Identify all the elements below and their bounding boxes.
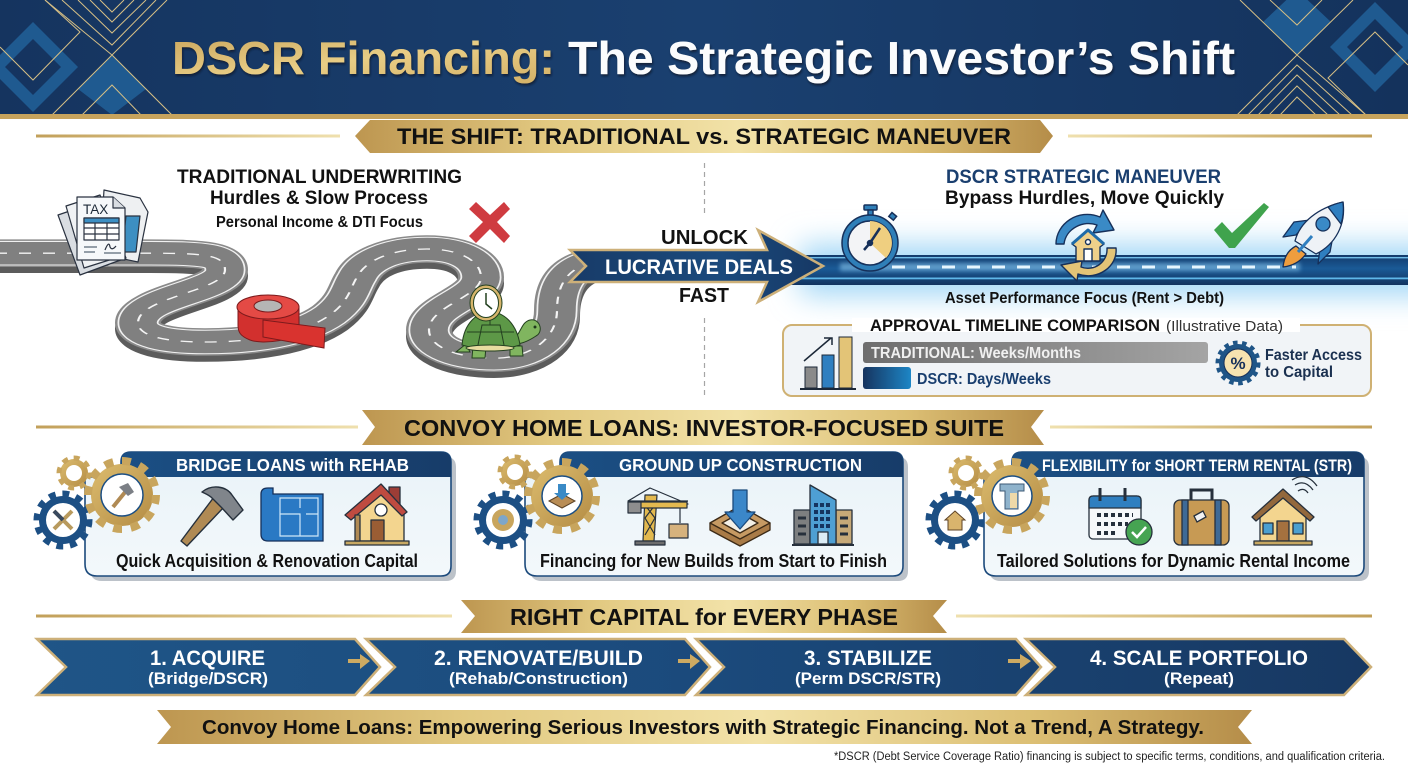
phase 4: scale portfolio: 4. SCALE PORTFOLIO: [1090, 646, 1308, 670]
card header: [121, 452, 451, 477]
card header: GROUND UP CONSTRUCTION: [619, 455, 862, 475]
icon: bar chart growth: [800, 337, 856, 389]
icon: hammer: [181, 487, 243, 546]
closing banner: Convoy Home Loans: Empowering Serious Investors with Strategic Financing. Not a Trend, A Strategy.: [202, 716, 1204, 739]
section banner: right capital: RIGHT CAPITAL for EVERY PHASE: [510, 604, 898, 630]
phase 1: acquire: 1. ACQUIRE: [150, 646, 265, 670]
icon: crane: [628, 488, 688, 545]
icon: rental house with wifi: [1252, 477, 1317, 545]
phase 2: renovate/build: 2. RENOVATE/BUILD: [434, 646, 643, 670]
card header: BRIDGE LOANS with REHAB: [176, 455, 409, 475]
panel: traditional underwriting: [0, 166, 590, 364]
caption: Financing for New Builds from Start to Finish: [540, 551, 887, 571]
icon: turtle with clock: [456, 285, 540, 358]
icon: tax documents: [58, 190, 148, 275]
unlock lucrative deals arrow: [570, 227, 823, 307]
phase 3: stabilize: [696, 639, 1041, 695]
card header: [1012, 452, 1364, 477]
section banner: the shift: [36, 120, 1372, 153]
header gold rule: [0, 114, 1408, 119]
gears: [37, 458, 156, 546]
icon: calendar: [1089, 488, 1152, 545]
section banner: investor-focused suite: [36, 410, 1372, 445]
panel: short term rental: [929, 452, 1369, 581]
section banner: investor-focused suite: CONVOY HOME LOANS: INVESTOR-FOCUSED SUITE: [404, 415, 1004, 441]
subheading: hurdles: Hurdles & Slow Process: [210, 187, 428, 209]
phase 2: renovate/build: (Rehab/Construction): [449, 670, 628, 688]
panel: bridge loans: [37, 452, 456, 581]
title: [172, 32, 1235, 84]
icon: house with cycle arrows: [1056, 210, 1116, 281]
icon: house under renovation: [345, 484, 409, 545]
icon: suitcase: [1174, 490, 1229, 545]
fast highway: [770, 255, 1408, 285]
highway glow: [800, 245, 1408, 295]
unlock lucrative deals arrow: FAST: [679, 285, 729, 307]
caption: Tailored Solutions for Dynamic Rental Income: [997, 551, 1350, 571]
phase 3: stabilize: 3. STABILIZE: [804, 646, 932, 670]
panel: ground up construction: [477, 452, 908, 581]
title: The Strategic Investor’s Shift: [568, 32, 1235, 84]
icon: tax documents: TAX: [83, 202, 108, 217]
heading: traditional: TRADITIONAL UNDERWRITING: [177, 166, 462, 188]
callout: faster access: to Capital: [1265, 364, 1333, 381]
phase 1: acquire: [37, 639, 380, 695]
caption: asset performance: Asset Performance Focus (Rent > Debt): [945, 290, 1224, 307]
phase 2: renovate/build: [366, 639, 710, 695]
bar: traditional: TRADITIONAL: Weeks/Months: [871, 345, 1081, 362]
closing banner: [157, 710, 1252, 744]
icon: green check: [1214, 203, 1269, 248]
callout: faster access: Faster Access: [1265, 347, 1362, 364]
chart heading: (Illustrative Data): [1166, 319, 1283, 335]
phase 4: scale portfolio: (Repeat): [1164, 670, 1234, 688]
unlock lucrative deals arrow: UNLOCK: [661, 227, 749, 249]
title: DSCR Financing:: [172, 32, 555, 84]
icon: building: [792, 485, 854, 545]
bar: traditional: [863, 342, 1208, 363]
unlock lucrative deals arrow: LUCRATIVE DEALS: [605, 256, 793, 279]
panel: dscr strategic maneuver: [770, 166, 1408, 307]
phase chevrons: [37, 639, 1371, 695]
subheading: bypass: Bypass Hurdles, Move Quickly: [945, 187, 1224, 209]
caption: personal income: Personal Income & DTI Focus: [216, 214, 423, 231]
chart heading: APPROVAL TIMELINE COMPARISON: [870, 317, 1160, 335]
icon: percent badge: %: [1230, 354, 1246, 373]
phase 3: stabilize: (Perm DSCR/STR): [795, 670, 941, 688]
winding road: [0, 249, 590, 364]
section banner: right capital: [36, 600, 1372, 633]
icon: percent badge: [1218, 343, 1258, 383]
icon: rocket: [1283, 202, 1344, 267]
gears: [929, 458, 1046, 546]
card header: FLEXIBILITY for SHORT TERM RENTAL (STR): [1042, 456, 1352, 475]
card header: [560, 452, 903, 477]
icon: foundation pit: [710, 490, 770, 546]
caption: Quick Acquisition & Renovation Capital: [116, 551, 418, 571]
chart heading: [870, 317, 1283, 335]
heading: dscr: DSCR STRATEGIC MANEUVER: [946, 166, 1221, 188]
bar: dscr: [863, 367, 1051, 389]
icon: red x: [469, 202, 510, 243]
bar: dscr: DSCR: Days/Weeks: [917, 371, 1051, 388]
gears: [477, 457, 596, 546]
phase 4: scale portfolio: [1026, 639, 1371, 695]
icon: stopwatch: [842, 205, 898, 271]
footnote: *DSCR (Debt Service Coverage Ratio) financing is subject to specific terms, conditions, and qualification criteria.: [834, 751, 1385, 763]
icon: red tape roll: [237, 295, 325, 348]
panel: approval timeline comparison: [783, 317, 1371, 396]
callout: faster access: [1265, 347, 1362, 381]
phase 1: acquire: (Bridge/DSCR): [148, 670, 268, 688]
icon: blueprint: [261, 488, 323, 541]
divider: [704, 163, 706, 396]
header banner: [0, 0, 1408, 115]
section banner: the shift: THE SHIFT: TRADITIONAL vs. STRATEGIC MANEUVER: [397, 124, 1011, 149]
